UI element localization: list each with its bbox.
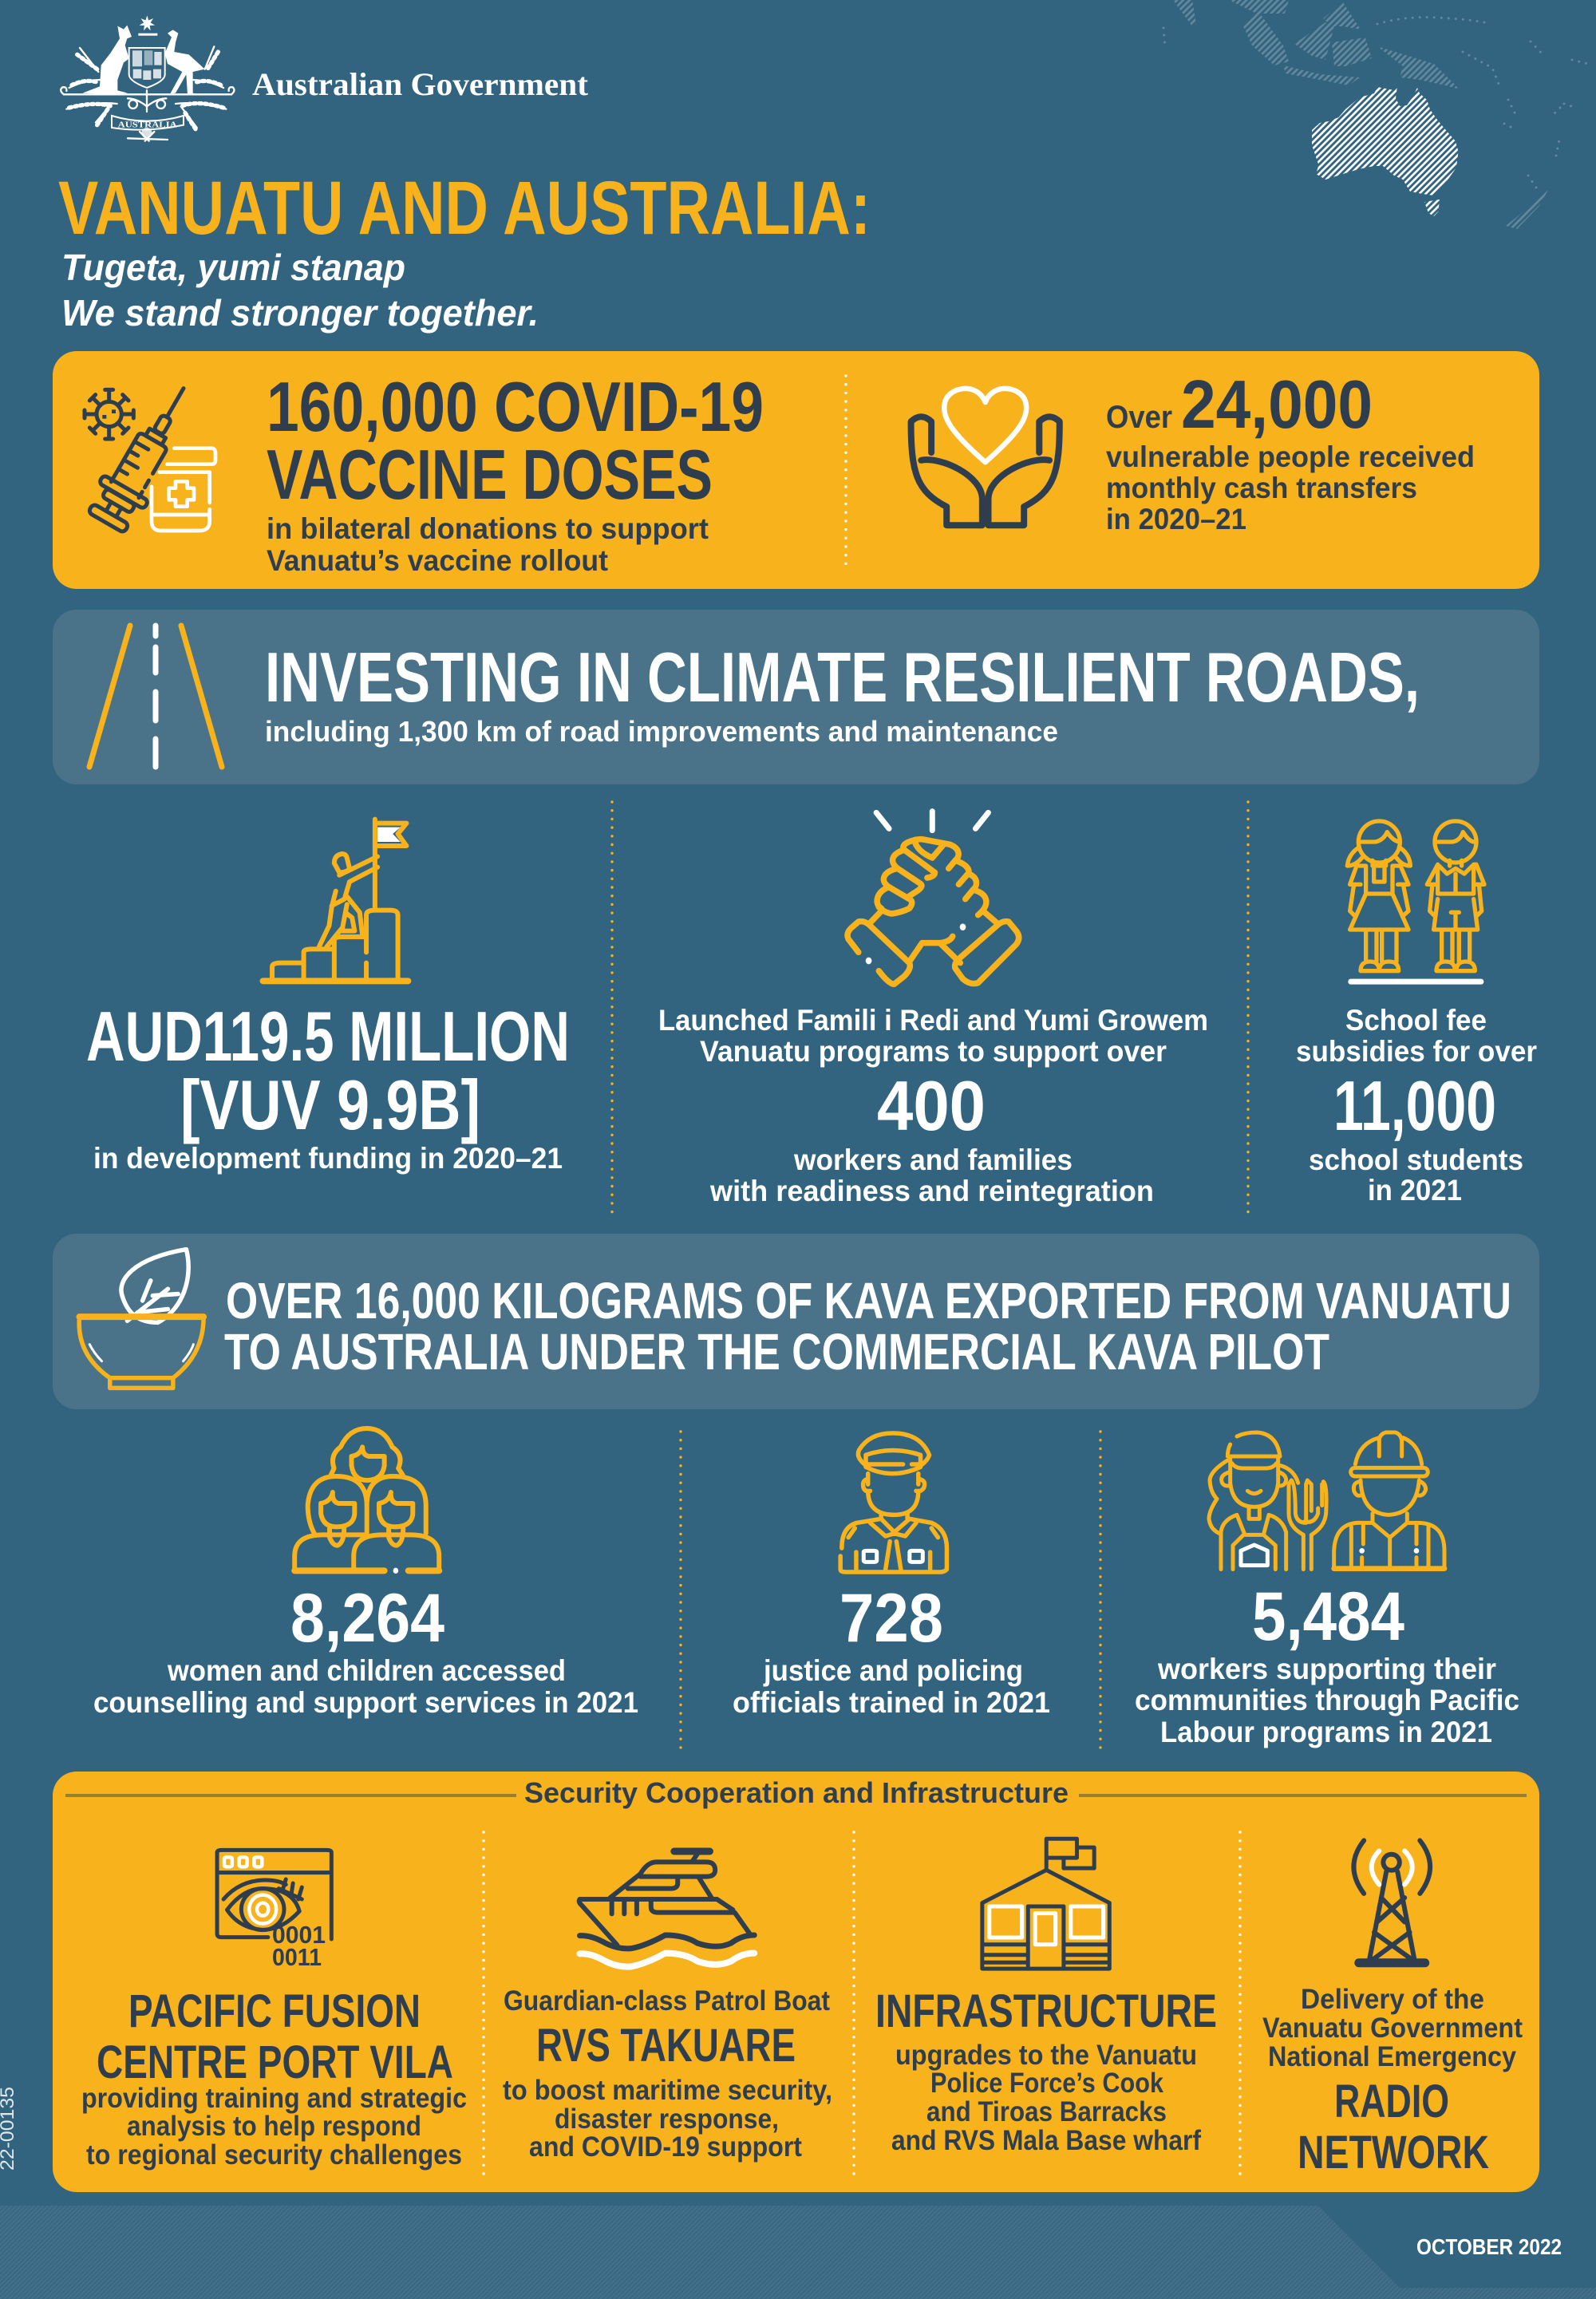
icon: cyber eye window bbox=[217, 1850, 331, 1971]
faded dotted islets bbox=[1163, 18, 1588, 188]
heading: security cooperation: Security Cooperation and Infrastructure bbox=[524, 1776, 1069, 1809]
stat: AUD119.5 million: [VUV 9.9B] bbox=[180, 1065, 480, 1144]
panel: kava exports bbox=[53, 1234, 1539, 1409]
stat: 400 workers and families bbox=[658, 1004, 1208, 1207]
stat: AUD119.5 million bbox=[86, 997, 570, 1175]
stat: 8,264: counselling and support services in 2021 bbox=[93, 1686, 638, 1719]
text: RVS Takuare: to boost maritime security, bbox=[503, 2075, 832, 2106]
faded neighbouring islands bbox=[1173, 0, 1548, 229]
column: justice and policing bbox=[733, 1433, 1050, 1719]
icon: cyber eye window: 0001 bbox=[272, 1921, 326, 1949]
icon: radio tower bbox=[1353, 1840, 1430, 1963]
map of region with Australia highlighted bbox=[1163, 0, 1588, 229]
icon: farmer and construction worker bbox=[1209, 1432, 1444, 1570]
text: Pacific Fusion Centre: analysis to help respond bbox=[127, 2111, 421, 2142]
column: worker programs bbox=[658, 812, 1208, 1207]
text: radio network: Delivery of the bbox=[1301, 1984, 1484, 2015]
text: Pacific Fusion Centre: to regional security challenges bbox=[86, 2139, 462, 2171]
heading: vaccine doses: 160,000 COVID-19 bbox=[267, 367, 764, 446]
stat: 8,264: 8,264 bbox=[290, 1580, 444, 1657]
text: infrastructure bbox=[875, 1985, 1217, 2156]
subtitle: Tugeta, yumi stanap bbox=[61, 247, 405, 288]
icon: Australian coat of arms: AUSTRALIA bbox=[118, 121, 178, 130]
stat: 728: justice and policing bbox=[763, 1654, 1023, 1687]
column: development funding bbox=[86, 820, 570, 1175]
icon: schoolchildren bbox=[1347, 821, 1484, 985]
icon: patrol boat bbox=[579, 1851, 754, 1967]
text: infrastructure: INFRASTRUCTURE bbox=[875, 1985, 1217, 2037]
heading: kava pilot bbox=[224, 1272, 1511, 1381]
text: infrastructure: and RVS Mala Base wharf bbox=[891, 2125, 1201, 2156]
icon: kava bowl and leaf bbox=[79, 1250, 203, 1388]
text: RVS Takuare bbox=[503, 1985, 832, 2163]
stat: 24,000 cash transfers: in 2020–21 bbox=[1106, 503, 1246, 535]
column: school fee subsidies bbox=[1296, 821, 1537, 1207]
stat: 11,000 students: in 2021 bbox=[1368, 1174, 1462, 1207]
stat: 5,484: Labour programs in 2021 bbox=[1160, 1716, 1492, 1748]
heading: vaccine doses: VACCINE DOSES bbox=[267, 435, 713, 514]
text: Pacific Fusion Centre: PACIFIC FUSION bbox=[128, 1985, 421, 2037]
stat: 24,000 cash transfers: Over bbox=[1106, 400, 1172, 435]
text: vaccine donations bbox=[267, 512, 709, 577]
text: RVS Takuare: and COVID-19 support bbox=[529, 2131, 802, 2163]
text: radio network: RADIO bbox=[1334, 2076, 1449, 2127]
subtitle: We stand stronger together. bbox=[61, 292, 539, 334]
heading: kava pilot: TO AUSTRALIA UNDER THE COMMERCIAL KAVA PILOT bbox=[224, 1323, 1329, 1381]
stat: 8,264 bbox=[93, 1580, 638, 1719]
stat: 5,484: 5,484 bbox=[1252, 1578, 1404, 1655]
stat: 24,000 cash transfers: monthly cash transfers bbox=[1106, 472, 1417, 504]
panel: climate resilient roads bbox=[53, 610, 1539, 784]
icon: women and children bbox=[294, 1428, 439, 1574]
icon: virus, syringe and medicine bottle bbox=[84, 375, 215, 535]
text: infrastructure: and Tiroas Barracks bbox=[926, 2096, 1167, 2127]
stat: 400 workers and families: Vanuatu programs to support over bbox=[700, 1035, 1167, 1068]
government name: Australian Government bbox=[252, 66, 589, 102]
stat: 5,484: workers supporting their bbox=[1157, 1653, 1496, 1685]
stat: 11,000 students: subsidies for over bbox=[1296, 1035, 1537, 1068]
column: Pacific Labour workers bbox=[1135, 1432, 1519, 1748]
icon: cyber eye window: 0011 bbox=[272, 1943, 322, 1971]
stat: 24,000 cash transfers: vulnerable people received bbox=[1106, 440, 1475, 473]
title: VANUATU AND AUSTRALIA: bbox=[58, 166, 871, 251]
text: vaccine donations: Vanuatu’s vaccine rollout bbox=[267, 544, 608, 577]
text: radio network bbox=[1262, 1984, 1523, 2179]
text: infrastructure: Police Force’s Cook bbox=[930, 2068, 1163, 2099]
stat: 8,264: women and children accessed bbox=[167, 1654, 566, 1687]
text: Pacific Fusion Centre: CENTRE PORT VILA bbox=[97, 2036, 453, 2088]
date: OCTOBER 2022 bbox=[1416, 2234, 1562, 2259]
icon: police building with flag bbox=[982, 1839, 1109, 1969]
stat: 11,000 students: School fee bbox=[1345, 1004, 1487, 1037]
text: Pacific Fusion Centre bbox=[81, 1985, 467, 2171]
stat: AUD119.5 million: in development funding in 2020–21 bbox=[93, 1142, 563, 1175]
stat: 5,484: communities through Pacific bbox=[1135, 1684, 1519, 1716]
text: vaccine donations: in bilateral donations to support bbox=[267, 512, 709, 545]
stat: 728 bbox=[733, 1580, 1050, 1719]
icon: hands holding heart bbox=[911, 389, 1060, 525]
icon: climber with flag on steps bbox=[263, 820, 408, 981]
icon: Australian coat of arms bbox=[61, 15, 234, 141]
stat: 728: 728 bbox=[839, 1580, 943, 1657]
stat: 11,000 students bbox=[1296, 1004, 1537, 1207]
text: road improvements: including 1,300 km of road improvements and maintenance bbox=[265, 715, 1058, 748]
stat: 400 workers and families: 400 bbox=[877, 1066, 986, 1145]
footer hatched band bbox=[0, 2206, 1596, 2299]
panel: security cooperation and infrastructure bbox=[53, 1772, 1539, 2192]
stat: 11,000 students: 11,000 bbox=[1333, 1066, 1496, 1145]
icon: road bbox=[89, 626, 222, 767]
stat: 728: officials trained in 2021 bbox=[733, 1686, 1050, 1719]
stat: 24,000 cash transfers: 24,000 bbox=[1181, 367, 1373, 443]
text: RVS Takuare: disaster response, bbox=[555, 2103, 779, 2135]
stat: 5,484 bbox=[1135, 1578, 1519, 1748]
text: radio network: Vanuatu Government bbox=[1262, 2013, 1523, 2044]
text: Pacific Fusion Centre: providing training and strategic bbox=[81, 2083, 467, 2114]
text: RVS Takuare: Guardian-class Patrol Boat bbox=[504, 1985, 830, 2017]
heading: vaccine doses bbox=[267, 367, 764, 514]
stat: 400 workers and families: with readiness and reintegration bbox=[709, 1175, 1154, 1207]
stat: 11,000 students: school students bbox=[1309, 1144, 1523, 1176]
stat: 400 workers and families: Launched Famili i Redi and Yumi Growem bbox=[658, 1004, 1208, 1037]
text: RVS Takuare: RVS TAKUARE bbox=[536, 2020, 796, 2072]
icon: clasped hands bbox=[847, 812, 1019, 984]
stat: 400 workers and families: workers and families bbox=[793, 1144, 1073, 1176]
icon: police officer bbox=[840, 1433, 946, 1572]
icon: Australia bbox=[1312, 86, 1459, 216]
column: women and children bbox=[93, 1428, 638, 1719]
text: infrastructure: upgrades to the Vanuatu bbox=[895, 2040, 1197, 2071]
text: radio network: NETWORK bbox=[1298, 2127, 1489, 2179]
text: radio network: National Emergency bbox=[1268, 2041, 1516, 2072]
stat: 24,000 cash transfers bbox=[1106, 367, 1475, 535]
subtitle bbox=[61, 247, 539, 334]
panel: vaccines and cash transfers bbox=[53, 351, 1539, 589]
stat: AUD119.5 million: AUD119.5 MILLION bbox=[86, 997, 570, 1076]
